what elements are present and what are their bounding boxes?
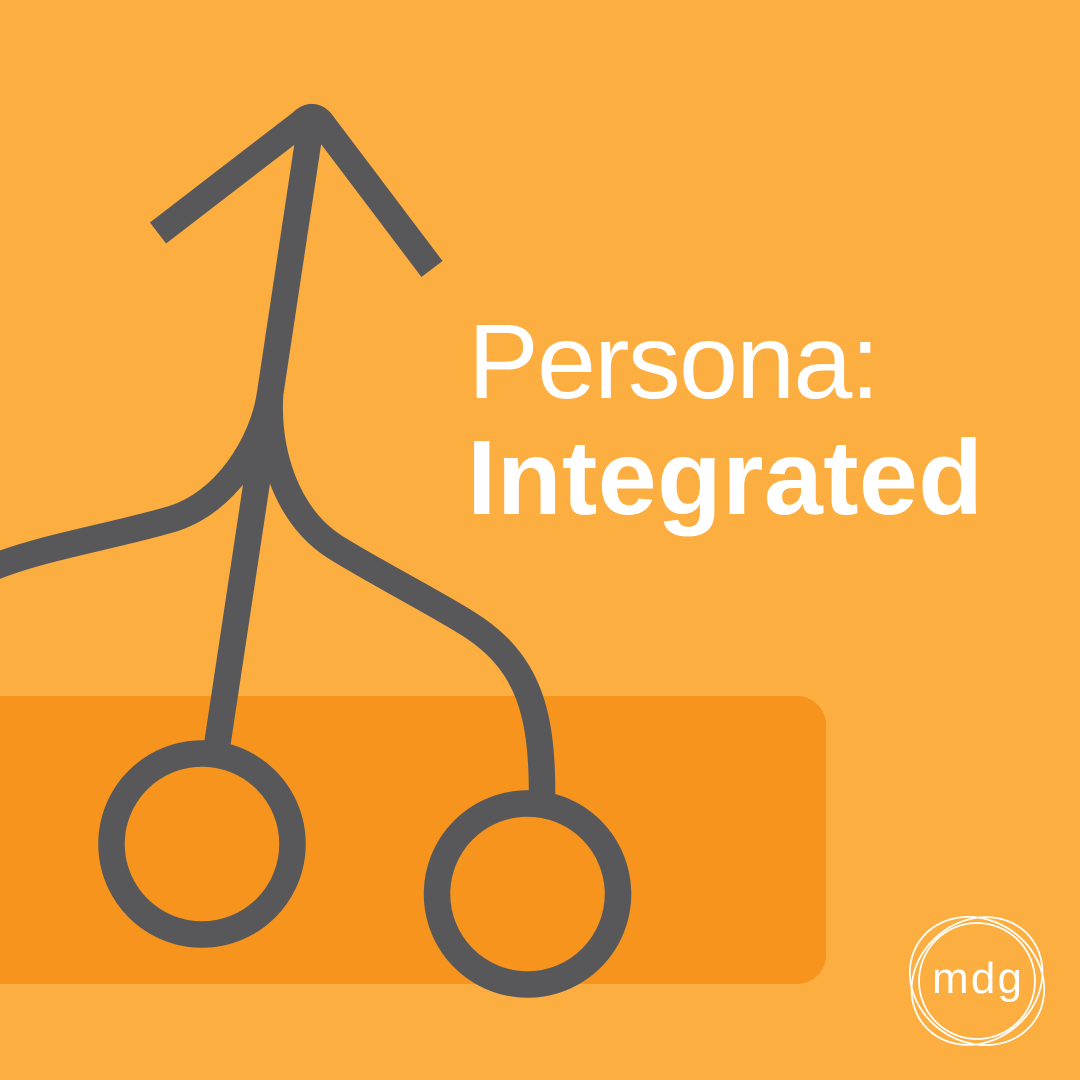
logo rings [885, 891, 1069, 1071]
icon: merging arrow diagram [0, 116, 618, 984]
title [467, 303, 983, 537]
panel: darker orange band [0, 696, 826, 984]
left branch curve [0, 395, 270, 567]
right branch curve [270, 395, 542, 802]
title line: Persona: Persona: [468, 303, 880, 421]
left circle node [112, 754, 292, 934]
right circle node [437, 804, 618, 984]
arrow head [158, 117, 432, 269]
logo wordmark: mdg [932, 954, 1022, 1003]
title line: Integrated: Integrated [467, 419, 983, 537]
arrow stem [217, 116, 312, 746]
icon: mdg logo [885, 891, 1069, 1071]
